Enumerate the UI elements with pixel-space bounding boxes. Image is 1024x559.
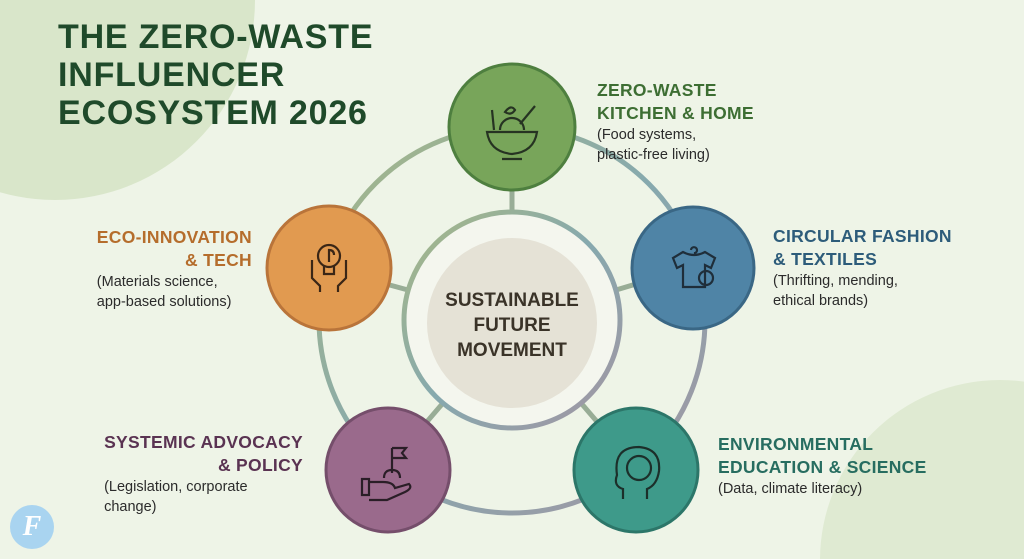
label: kitchen: plastic-free living): [597, 147, 710, 163]
label: policy: change): [104, 499, 156, 515]
center circle: MOVEMENT: [457, 340, 567, 361]
title: INFLUENCER: [58, 56, 285, 94]
spokes: [386, 188, 636, 424]
label: education: (Data, climate literacy): [718, 481, 862, 497]
title: THE ZERO-WASTE: [58, 18, 373, 56]
label: innovation: app-based solutions): [97, 294, 231, 310]
label: fashion: & TEXTILES: [773, 249, 877, 269]
label: policy: (Legislation, corporate: [104, 479, 248, 495]
label: fashion: (Thrifting, mending,: [773, 273, 898, 289]
label: policy: [104, 432, 303, 515]
label: innovation: (Materials science,: [97, 274, 218, 290]
title: ECOSYSTEM 2026: [58, 94, 368, 132]
label: kitchen: KITCHEN & HOME: [597, 103, 754, 123]
label: kitchen: [597, 80, 754, 163]
label: innovation: ECO-INNOVATION: [97, 227, 252, 247]
node: fashion: [632, 207, 754, 329]
label: education: ENVIRONMENTAL: [718, 434, 873, 454]
label: fashion: ethical brands): [773, 293, 868, 309]
center circle: FUTURE: [473, 315, 551, 336]
title: [58, 18, 373, 132]
label: fashion: [773, 226, 952, 309]
center circle: [427, 238, 597, 408]
logo: [10, 505, 54, 549]
label: policy: & POLICY: [218, 455, 303, 475]
node: education: [574, 408, 698, 532]
label: kitchen: (Food systems,: [597, 127, 696, 143]
inner ring: [404, 212, 620, 428]
label: innovation: & TECH: [185, 250, 252, 270]
label: education: [718, 434, 927, 497]
label: innovation: [97, 227, 252, 310]
label: education: EDUCATION & SCIENCE: [718, 457, 927, 477]
node: policy: [326, 408, 450, 532]
node: kitchen: [449, 64, 575, 190]
node: innovation: [267, 206, 391, 330]
label: policy: SYSTEMIC ADVOCACY: [104, 432, 303, 452]
label: fashion: CIRCULAR FASHION: [773, 226, 952, 246]
logo: F: [23, 511, 41, 542]
label: kitchen: ZERO-WASTE: [597, 80, 717, 100]
center circle: SUSTAINABLE: [445, 290, 579, 311]
outer ring: [319, 127, 705, 513]
